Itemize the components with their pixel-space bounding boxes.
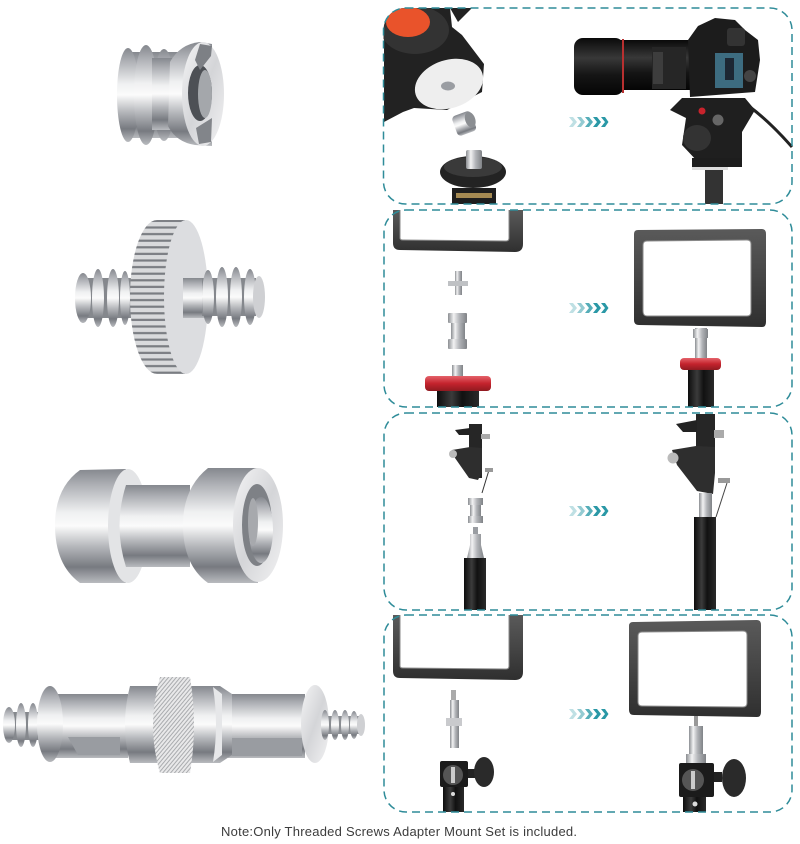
- long stud: [446, 690, 462, 748]
- arrow: [569, 506, 608, 516]
- product: threaded reducer adapter: [117, 42, 224, 146]
- ball head with screw: [440, 150, 506, 204]
- stand with stud: [464, 527, 486, 610]
- panel 2: LED panel on red mount: [384, 210, 792, 407]
- spigot: [468, 498, 483, 523]
- arrow: [569, 709, 608, 719]
- video head: [670, 98, 792, 204]
- assembled bracket and stand: [668, 414, 730, 610]
- product: double-ended screw with knurled disc: [75, 220, 265, 374]
- dashed frame: [384, 210, 792, 407]
- arrow: [569, 117, 608, 127]
- camera with lens: [574, 18, 760, 97]
- ball head mount: [440, 757, 494, 812]
- panel 3: light stand bracket: [384, 413, 792, 610]
- tripod head underside with white plate: [381, 6, 490, 122]
- LED frame, partial: [393, 615, 523, 680]
- dashed frame: [384, 8, 792, 204]
- small double screw: [448, 271, 468, 295]
- panel 1: camera on video head: [381, 6, 792, 204]
- dashed frame: [384, 413, 792, 610]
- panel 4: LED panel on ball head: [384, 615, 792, 812]
- red mount with stud: [425, 365, 491, 407]
- assembled LED panel: [634, 229, 766, 407]
- note text: Note:Only Threaded Screws Adapter Mount Set is included.: [221, 824, 577, 839]
- bracket, exploded: [449, 424, 493, 493]
- product: spigot with two female ends: [55, 468, 283, 583]
- small adapter: [451, 109, 479, 137]
- LED frame, partial: [393, 210, 523, 252]
- arrow: [569, 303, 608, 313]
- product: long stud with knurled ring: [3, 677, 365, 773]
- small spigot: [448, 313, 467, 349]
- dashed frame: [384, 615, 792, 812]
- assembled LED panel: [629, 620, 761, 812]
